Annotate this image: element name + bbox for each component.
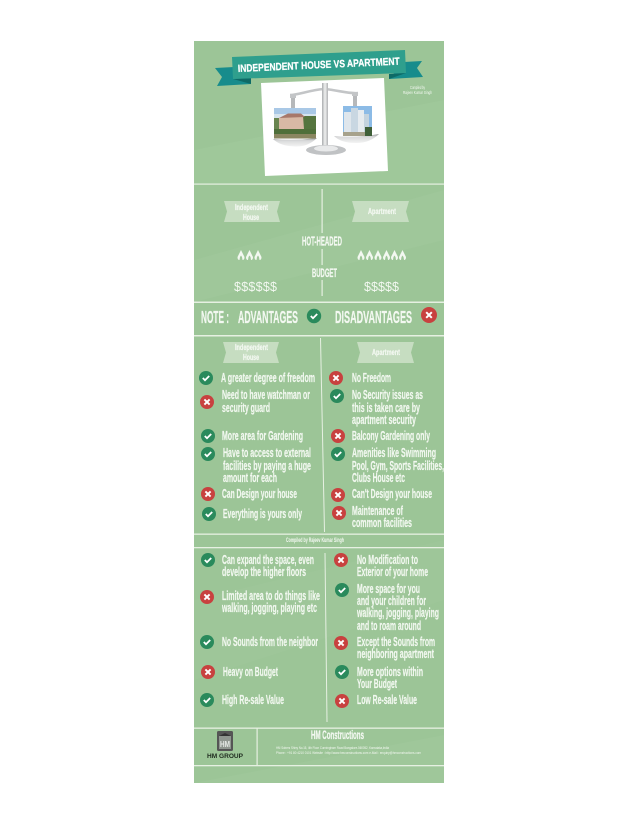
ribbon: Apartment [352, 201, 409, 222]
compiled by credit: Compiled by [410, 85, 425, 90]
legend row: DISADVANTAGES [335, 307, 412, 327]
list: apartment, part 1: No Freedom [352, 371, 391, 385]
list: independent house, part 1 [199, 371, 315, 521]
list: apartment, part 2: neighboring apartment [357, 647, 434, 661]
footer: HM Group logo: HM [220, 740, 230, 749]
list: apartment, part 1: Amenities like Swimming [352, 446, 436, 460]
compiled by strip: Compiled by Rajeev Kumar Singh [286, 537, 344, 544]
list: independent house, part 1: Have to access to external [223, 446, 311, 460]
list: apartment, part 2: Low Re-sale Value [357, 693, 417, 707]
footer: company details [276, 728, 421, 755]
list: apartment, part 1 [329, 371, 444, 530]
legend row [201, 307, 437, 327]
footer divider [256, 728, 258, 765]
list: apartment, part 2: No Modification to [357, 553, 418, 567]
compiled by credit: Rajeev Kumar Singh [403, 90, 432, 95]
list: apartment, part 1: Maintenance of [352, 504, 403, 518]
footer: HM Group logo [207, 731, 244, 760]
background panel [194, 41, 444, 783]
footer: company details: Phone : +91 80 4210 0101 Website : http://www.hmconstructions.com e-Mail : enquiry@hmconstructions.com [276, 751, 421, 755]
left pan with house [273, 108, 317, 147]
list: independent house, part 1: amount for each [223, 471, 277, 485]
list: independent house, part 2: develop the higher floors [222, 565, 306, 579]
list: apartment, part 1: Balcony Gardening only [352, 429, 430, 443]
list: independent house, part 1: Everything is yours only [223, 507, 302, 521]
ribbon: Independent House [224, 201, 280, 222]
photo: balance scale with house and apartment [261, 78, 388, 176]
list: independent house, part 2: Can expand the space, even [222, 553, 314, 567]
title text: INDEPENDENT HOUSE VS APARTMENT [238, 56, 400, 75]
list: apartment, part 1: common facilities [352, 516, 412, 530]
list: independent house, part 1: A greater degree of freedom [221, 371, 315, 385]
budget: apartment: $$$$$ [364, 280, 399, 294]
flames: independent house [238, 250, 262, 260]
list: apartment, part 1: Clubs House etc [352, 471, 405, 485]
footer: company details: HM Sobers Shiny No.15, 4th Floor Cunningham Road Bangalore-560052, Karnataka,India [276, 746, 390, 750]
footer: company details: HM Constructions [311, 728, 364, 742]
scale beam and stand [290, 83, 358, 155]
title banner [215, 50, 423, 86]
list: apartment, part 2: Your Budget [357, 677, 397, 691]
list: apartment, part 2: Except the Sounds from [357, 635, 435, 649]
second divider [324, 553, 328, 722]
text: BUDGET [312, 266, 337, 280]
ribbon: Apartment [357, 342, 414, 363]
list: independent house, part 2: High Re-sale Value [222, 693, 284, 707]
list: independent house, part 1: facilities by paying a huge [223, 459, 311, 473]
list: apartment, part 1: this is taken care by [352, 401, 420, 415]
list: apartment, part 2: More options within [357, 665, 423, 679]
right pan with apartment [334, 106, 379, 143]
ribbon: Apartment: Apartment [368, 206, 396, 216]
list: apartment, part 1: Pool, Gym, Sports Facilities, [352, 459, 444, 473]
ribbon: Independent House: Independent [235, 202, 268, 212]
ribbon: Independent House: House [243, 212, 259, 222]
footer: HM Group logo: HM GROUP [207, 753, 244, 760]
compiled by credit [403, 85, 432, 95]
list: apartment, part 2: walking, jogging, playing [356, 606, 439, 620]
flames: apartment [358, 250, 406, 260]
list: independent house, part 2: walking, jogging, playing etc [221, 601, 317, 615]
list: apartment, part 2 [334, 553, 439, 708]
list: apartment, part 2: and to roam around [357, 619, 421, 633]
ribbon: Apartment: Apartment [372, 347, 400, 357]
list: independent house, part 2: Limited area to do things like [222, 589, 320, 603]
ribbon: Independent House: Independent [235, 342, 268, 352]
comparison divider [322, 189, 323, 296]
ribbon: Independent House [223, 342, 279, 363]
budget: independent house: $$$$$$ [234, 280, 277, 294]
list: apartment, part 1: apartment security [352, 413, 416, 427]
list: independent house, part 1: Need to have watchman or [222, 388, 310, 402]
list: apartment, part 1: No Security issues as [352, 388, 423, 402]
list: apartment, part 1: Can't Design your house [352, 487, 432, 501]
list: independent house, part 1: More area for Gardening [222, 429, 303, 443]
legend row: NOTE : [201, 307, 229, 327]
list: apartment, part 2: More space for you [357, 582, 420, 596]
advantages divider [320, 338, 325, 532]
list: independent house, part 2: Heavy on Budget [223, 665, 278, 679]
list: independent house, part 1: Can Design your house [222, 487, 297, 501]
legend row: ADVANTAGES [238, 307, 298, 327]
list: independent house, part 2 [200, 553, 320, 707]
ribbon: Independent House: House [243, 352, 259, 362]
list: apartment, part 2: Exterior of your home [357, 565, 428, 579]
list: independent house, part 1: security guard [222, 401, 270, 415]
text: HOT-HEADED [302, 234, 342, 248]
list: apartment, part 2: and your children for [357, 594, 426, 608]
list: independent house, part 2: No Sounds from the neighbor [222, 635, 318, 649]
